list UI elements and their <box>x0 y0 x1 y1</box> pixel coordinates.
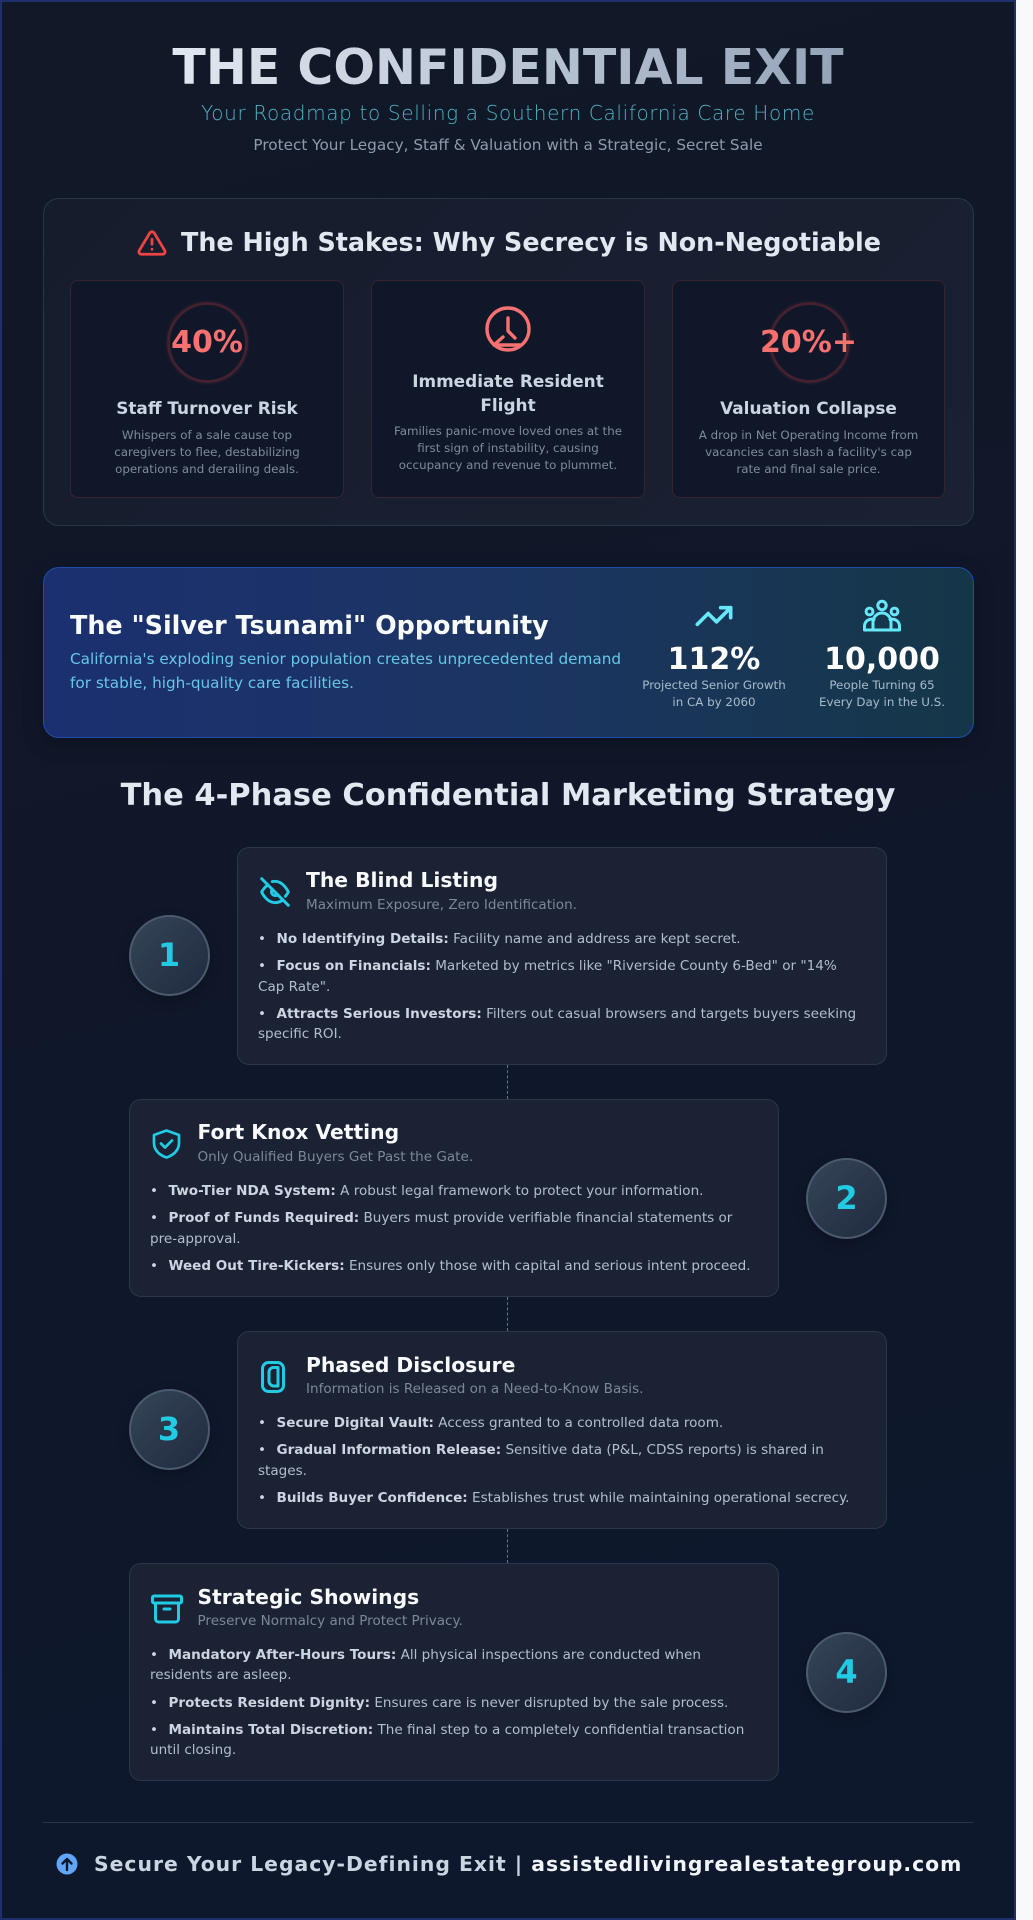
bullet list: • <box>258 1006 266 1022</box>
card text: valuation collapse: A drop in Net Operating Income from <box>699 428 918 442</box>
card text: valuation collapse: rate and final sale price. <box>736 462 881 476</box>
bullet list: • <box>258 1442 266 1458</box>
bullet list: • <box>150 1210 158 1226</box>
icon: footer arrow <box>56 1854 78 1874</box>
subtitle: Your Roadmap to Selling a Southern California Care Home <box>201 101 815 125</box>
text: silver tsunami: California's exploding senior population creates unprecedented demand <box>70 650 621 668</box>
footer call to action: Secure Your Legacy-Defining Exit | assistedlivingrealestategroup.com <box>94 1852 962 1876</box>
card title: valuation collapse: Valuation Collapse <box>720 398 897 418</box>
card text: valuation collapse: vacancies can slash a facility's cap <box>705 445 912 459</box>
icon: archive box <box>151 1594 183 1624</box>
card text: staff turnover: operations and derailing deals. <box>115 462 299 476</box>
stat ring 40% <box>166 302 248 382</box>
bullet list <box>150 1647 744 1758</box>
phase number 1 <box>128 915 210 996</box>
text: silver tsunami: for stable, high-quality care facilities. <box>70 674 354 692</box>
icon: clock with arrow <box>485 306 531 352</box>
bullet list: Mandatory After-Hours Tours: All physical inspections are conducted when <box>168 1647 701 1663</box>
panel: high stakes <box>42 198 974 526</box>
icon: document stack <box>261 1361 285 1393</box>
bullet list: Cap Rate". <box>258 979 330 995</box>
bullet list: Secure Digital Vault: Access granted to a controlled data room. <box>276 1415 723 1431</box>
card title: staff turnover risk: Staff Turnover Risk <box>116 398 298 418</box>
panel: phase 2 fort knox vetting <box>129 1099 779 1297</box>
bullet list: specific ROI. <box>258 1026 342 1042</box>
card text: valuation collapse <box>698 428 918 476</box>
bullet list <box>258 931 856 1042</box>
icon: eye off <box>260 877 290 907</box>
tagline: Protect Your Legacy, Staff & Valuation with a Strategic, Secret Sale <box>253 136 763 154</box>
bullet list: Focus on Financials: Marketed by metrics like "Riverside County 6-Bed" or "14% <box>276 958 837 974</box>
stat label: people turning 65: Every Day in the U.S. <box>819 694 945 708</box>
card title: immediate resident flight: Immediate Resident <box>412 371 604 391</box>
bullet list: Maintains Total Discretion: The final step to a completely confidential transaction <box>168 1722 744 1738</box>
phase subtitle: Maximum Exposure, Zero Identification. <box>306 897 577 913</box>
bullet list <box>258 1415 849 1506</box>
bullet list: pre-approval. <box>150 1231 241 1247</box>
phase subtitle: Preserve Normalcy and Protect Privacy. <box>198 1613 463 1629</box>
stat label: senior growth <box>642 678 786 708</box>
phase number 4 <box>806 1632 887 1712</box>
phase subtitle: Only Qualified Buyers Get Past the Gate. <box>198 1149 473 1165</box>
card text: resident flight <box>394 424 622 472</box>
panel: phase 3 phased disclosure <box>237 1331 887 1529</box>
bullet list: • <box>150 1183 158 1199</box>
bullet list: • <box>150 1722 158 1738</box>
bullet list: • <box>150 1647 158 1663</box>
bullet list: • <box>258 931 266 947</box>
heading: silver tsunami: The "Silver Tsunami" Opportunity <box>70 610 549 640</box>
phase subtitle: Information is Released on a Need-to-Know Basis. <box>306 1381 643 1397</box>
stat ring 20% <box>768 302 850 382</box>
card text: staff turnover <box>114 428 300 476</box>
card text: resident flight: occupancy and revenue to plummet. <box>399 458 617 472</box>
phase title: Phased Disclosure <box>306 1353 515 1377</box>
bullet list: Two-Tier NDA System: A robust legal framework to protect your information. <box>168 1183 703 1199</box>
stat label: people turning 65 <box>819 678 945 708</box>
heading: high stakes: The High Stakes: Why Secrecy is Non-Negotiable <box>181 227 881 257</box>
panel: phase 4 strategic showings <box>129 1563 779 1781</box>
bullet list: • <box>258 1415 266 1431</box>
stat label: people turning 65: People Turning 65 <box>829 678 935 692</box>
panel: silver tsunami <box>42 567 974 738</box>
title: THE CONFIDENTIAL EXIT <box>172 39 844 96</box>
stat label: senior growth: Projected Senior Growth <box>642 678 786 692</box>
card text: staff turnover: caregivers to flee, destabilizing <box>114 445 300 459</box>
bullet list: No Identifying Details: Facility name and address are kept secret. <box>276 931 741 947</box>
bullet list: Gradual Information Release: Sensitive data (P&L, CDSS reports) is shared in <box>276 1442 824 1458</box>
card: valuation collapse <box>672 280 945 498</box>
heading: 4-phase strategy: The 4-Phase Confidential Marketing Strategy <box>121 778 895 813</box>
phase title: Strategic Showings <box>198 1585 419 1609</box>
icon: warning triangle <box>138 230 166 256</box>
bullet list: stages. <box>258 1463 307 1479</box>
card title: immediate resident flight <box>412 371 604 415</box>
phase number 2 <box>806 1158 887 1238</box>
bullet list: Weed Out Tire-Kickers: Ensures only those with capital and serious intent proceed. <box>168 1258 751 1274</box>
bullet list: residents are asleep. <box>150 1667 292 1683</box>
card: resident flight <box>371 280 645 498</box>
phase title: The Blind Listing <box>306 868 498 892</box>
bullet list: Attracts Serious Investors: Filters out casual browsers and targets buyers seeking <box>276 1006 856 1022</box>
bullet list: Proof of Funds Required: Buyers must provide verifiable financial statements or <box>168 1210 732 1226</box>
bullet list <box>150 1183 751 1274</box>
bullet list: • <box>258 958 266 974</box>
card text: resident flight: first sign of instability, causing <box>417 441 599 455</box>
stat: 112%: 112% <box>668 642 760 677</box>
bullet list: • <box>258 1490 266 1506</box>
stat: 40%: 40% <box>171 325 243 360</box>
icon: trending up <box>695 606 733 626</box>
icon: shield check <box>152 1129 180 1159</box>
phase number 1: 1 <box>158 936 180 974</box>
card text: resident flight: Families panic-move loved ones at the <box>394 424 622 438</box>
bullet list: Protects Resident Dignity: Ensures care is never disrupted by the sale process. <box>168 1695 728 1711</box>
phase number 3 <box>128 1389 210 1470</box>
card: staff turnover <box>70 280 344 498</box>
phase number 4: 4 <box>835 1652 858 1690</box>
phase title: Fort Knox Vetting <box>198 1120 399 1144</box>
phase number 3: 3 <box>158 1410 180 1448</box>
phase number 2: 2 <box>835 1178 858 1216</box>
panel: phase 1 blind listing <box>237 847 887 1065</box>
bullet list: Builds Buyer Confidence: Establishes trust while maintaining operational secrecy. <box>276 1490 849 1506</box>
stat label: senior growth: in CA by 2060 <box>672 694 756 708</box>
card title: immediate resident flight: Flight <box>480 395 536 415</box>
stat: 20%+: 20%+ <box>760 325 857 360</box>
icon: people <box>863 600 901 632</box>
bullet list: • <box>150 1695 158 1711</box>
stat: 10,000: 10,000 <box>824 642 940 677</box>
card text: staff turnover: Whispers of a sale cause top <box>122 428 292 442</box>
bullet list: until closing. <box>150 1742 236 1758</box>
text: silver tsunami <box>70 650 621 692</box>
bullet list: • <box>150 1258 158 1274</box>
